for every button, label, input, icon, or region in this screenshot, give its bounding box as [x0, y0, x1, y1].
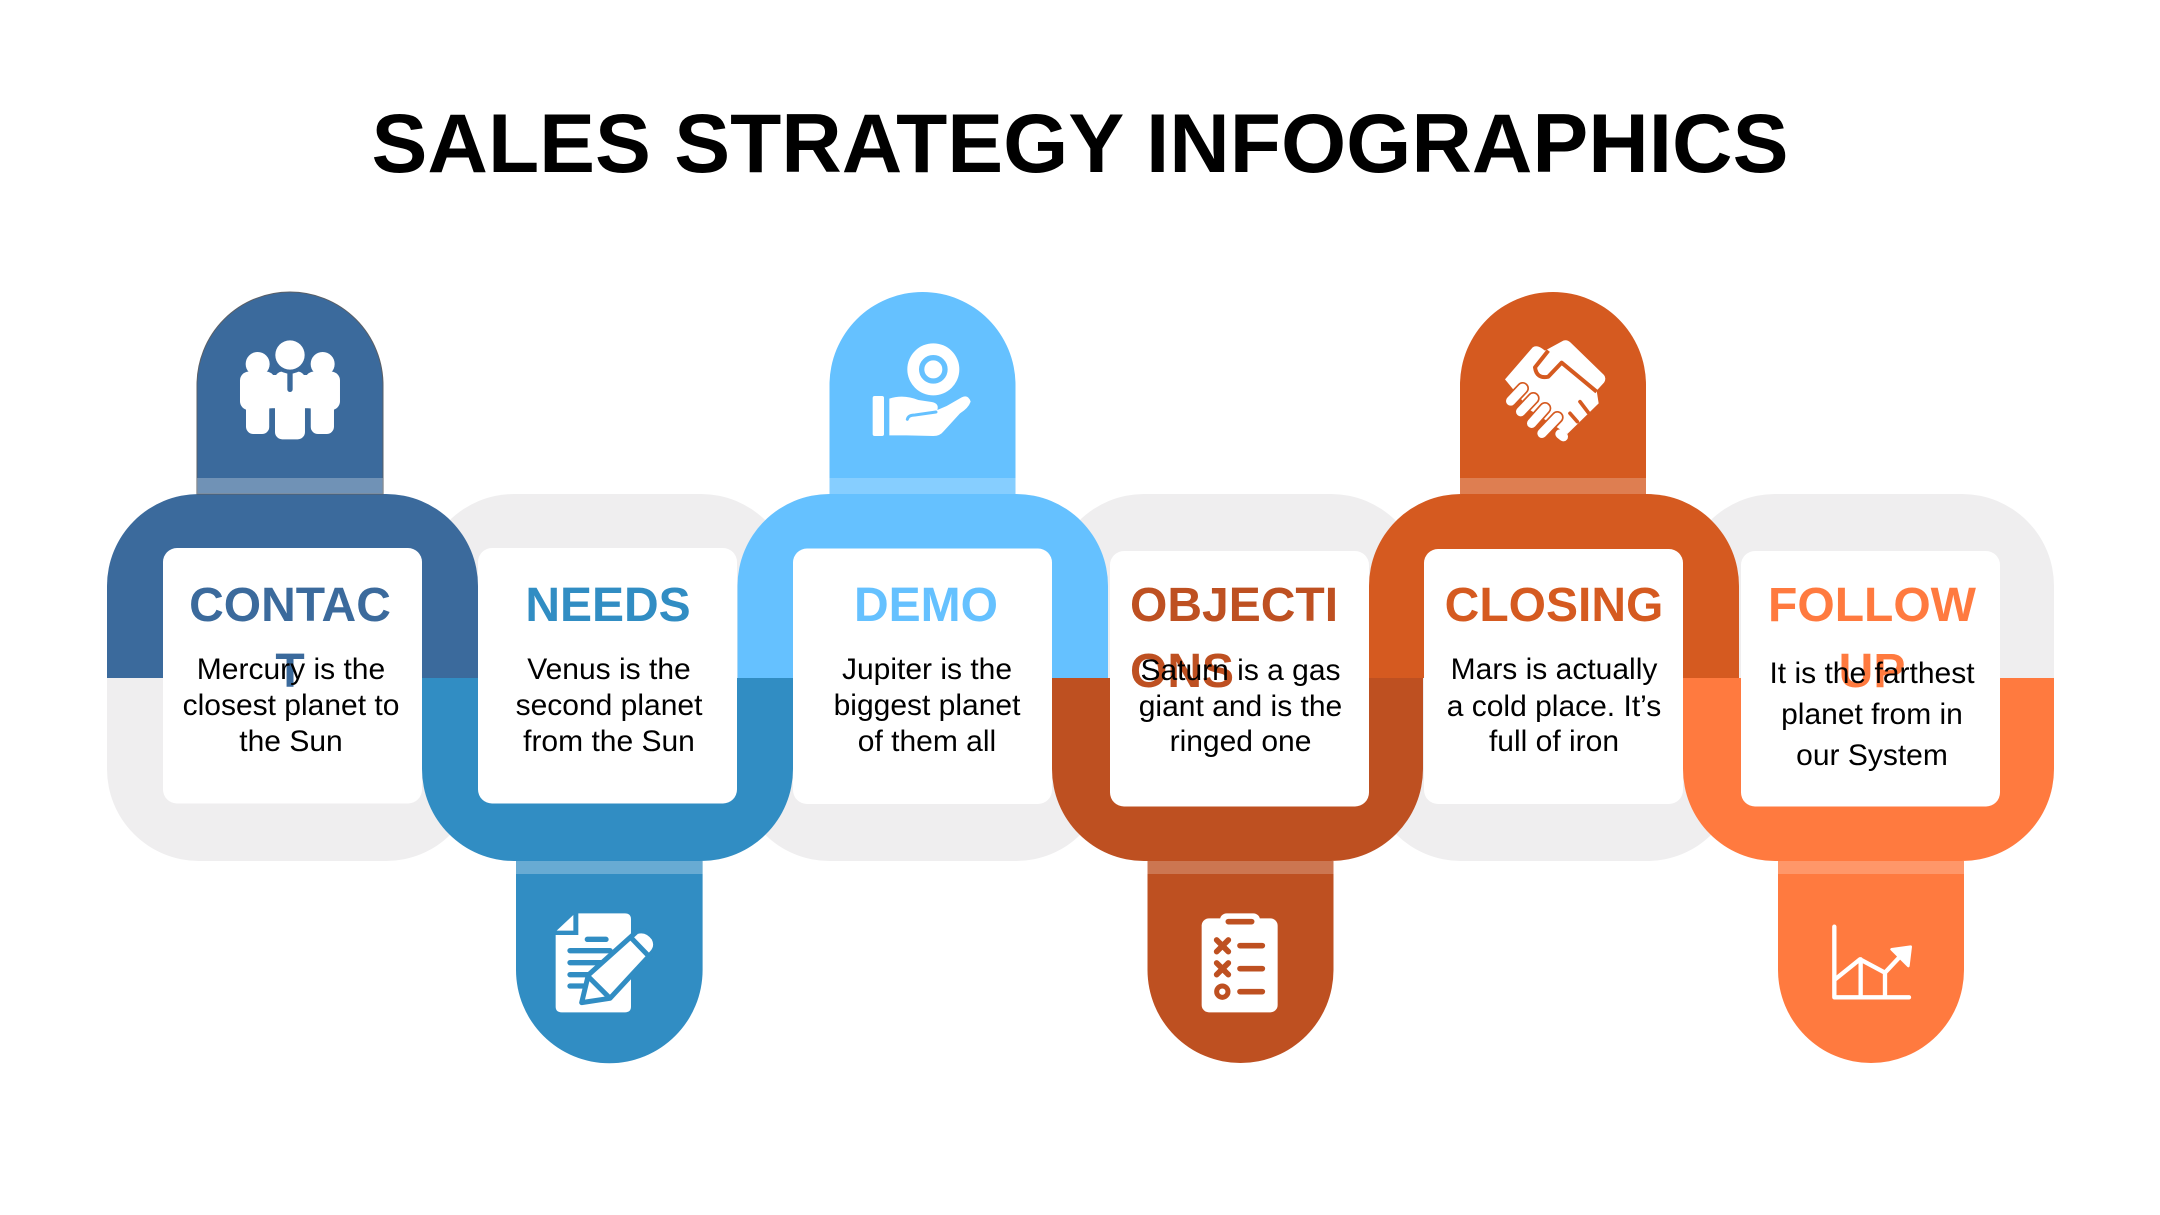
- follow up heading: FOLLOW: [1768, 579, 1977, 632]
- demo ring top half: [738, 494, 1108, 678]
- icon: document and pencil: [556, 913, 656, 1012]
- closing body text: a cold place. It’s: [1447, 690, 1661, 723]
- demo white card: [793, 548, 1052, 804]
- follow up tab: [1778, 861, 1964, 1063]
- objections body text: ringed one: [1170, 725, 1311, 758]
- needs heading: NEEDS: [525, 579, 691, 632]
- closing tab: [1460, 292, 1646, 494]
- panel: needs: [422, 548, 793, 1063]
- icon: clipboard checklist: [1202, 913, 1278, 1012]
- needs body text: Venus is the: [527, 653, 691, 686]
- closing body text: Mars is actually: [1451, 653, 1657, 686]
- panel: contact: [107, 292, 478, 804]
- closing body text: full of iron: [1489, 725, 1619, 758]
- icon: handshake: [1505, 340, 1605, 437]
- follow up body text: our System: [1796, 739, 1948, 772]
- objections body text: giant and is the: [1139, 690, 1342, 723]
- needs tab band: [516, 861, 703, 874]
- follow up body text: planet from in: [1781, 698, 1963, 731]
- contact tab: [197, 292, 383, 494]
- follow up white card: [1741, 551, 2000, 806]
- objections body text: Saturn is a gas: [1140, 654, 1341, 687]
- contact heading: CONTAC: [189, 579, 391, 632]
- objections white card: [1110, 551, 1369, 806]
- contact heading: T: [275, 645, 305, 698]
- contact tab band: [197, 478, 383, 494]
- contact body text: closest planet to: [183, 689, 399, 722]
- icon: hand holding coin: [873, 343, 971, 436]
- panel: follow up: [1683, 551, 2054, 1063]
- grey ring backgrounds: [107, 494, 2054, 861]
- objections tab: [1148, 861, 1334, 1063]
- objections ring bottom half: [1052, 678, 1423, 861]
- demo body text: of them all: [858, 725, 996, 758]
- contact body text: the Sun: [239, 725, 343, 758]
- panel: demo: [738, 292, 1108, 804]
- closing white card: [1424, 549, 1683, 804]
- needs ring bottom half: [422, 678, 793, 861]
- demo heading: DEMO: [854, 579, 998, 632]
- follow up heading: UP: [1839, 645, 1905, 698]
- panel: closing: [1369, 292, 1739, 804]
- objections tab band: [1148, 861, 1334, 874]
- follow up ring bottom half: [1683, 678, 2054, 861]
- demo body text: biggest planet: [834, 689, 1021, 722]
- icon: people: [240, 336, 340, 439]
- needs body text: from the Sun: [523, 725, 695, 758]
- demo tab: [830, 292, 1016, 494]
- follow up body text: It is the farthest: [1769, 657, 1975, 690]
- contact white card: [163, 548, 422, 804]
- needs body text: second planet: [516, 689, 703, 722]
- needs tab: [516, 861, 703, 1063]
- follow up tab band: [1778, 861, 1964, 874]
- title: SALES STRATEGY INFOGRAPHICS: [372, 96, 1788, 190]
- contact ring top half: [107, 494, 478, 678]
- closing heading: CLOSING: [1445, 579, 1663, 632]
- objections heading: OBJECTI: [1130, 579, 1338, 632]
- closing tab band: [1460, 478, 1646, 494]
- demo body text: Jupiter is the: [842, 653, 1012, 686]
- panel: objections: [1052, 551, 1423, 1063]
- closing ring top half: [1369, 494, 1739, 678]
- icon: growth chart: [1834, 927, 1911, 997]
- contact body text: Mercury is the: [197, 653, 385, 686]
- needs white card: [478, 548, 737, 804]
- objections heading: ONS: [1130, 645, 1234, 698]
- demo tab band: [830, 478, 1016, 494]
